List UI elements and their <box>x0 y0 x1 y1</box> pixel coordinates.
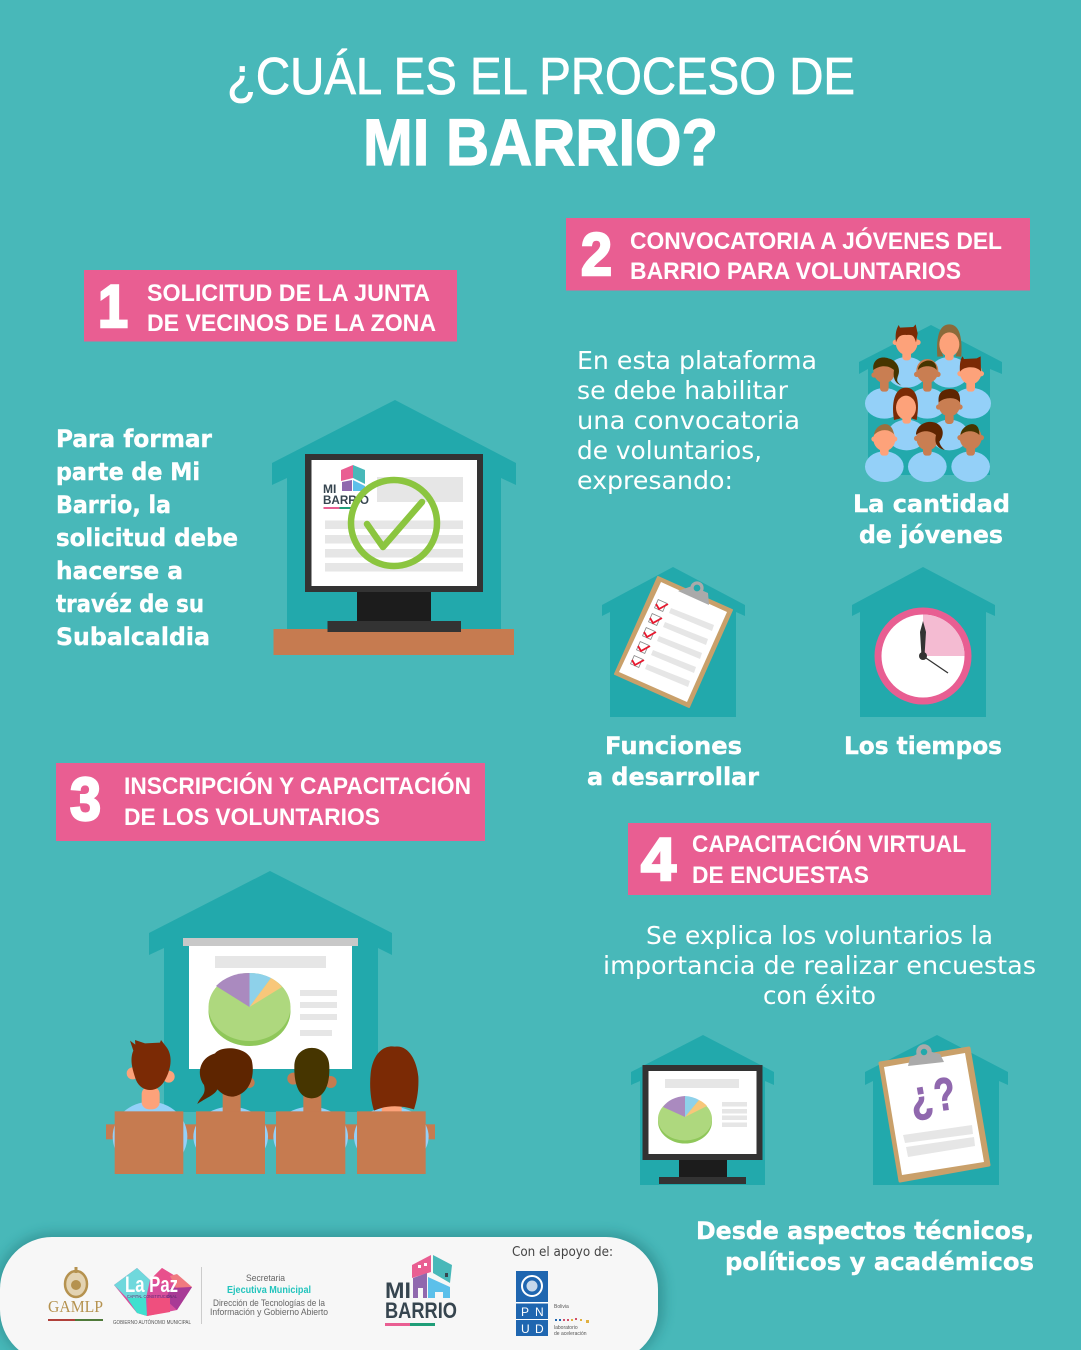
panel: footer logos <box>0 1233 664 1350</box>
icon: clipboard with question marks in a house <box>865 1035 1008 1185</box>
label: los tiempos: Los tiempos <box>844 732 1002 760</box>
step 4 heading: 4 <box>641 826 677 893</box>
logo: Mi Barrio: BARRIO <box>385 1298 457 1323</box>
step 4 heading: DE ENCUESTAS <box>692 862 869 889</box>
step 3 heading: DE LOS VOLUNTARIOS <box>124 804 380 831</box>
step 1 heading: DE VECINOS DE LA ZONA <box>147 310 436 337</box>
logo: GAMLP: GAMLP <box>48 1297 103 1316</box>
label: funciones a desarrollar <box>587 732 759 791</box>
icon: monitor with pie chart in a house <box>631 1035 774 1185</box>
logo: PNUD: laboratorio <box>554 1325 578 1331</box>
step 1 text: Subalcaldia <box>56 623 210 651</box>
step 2 text: expresando: <box>577 466 733 495</box>
logo: Mi Barrio <box>385 1255 457 1326</box>
step 4 heading <box>628 823 991 895</box>
step 2 heading: BARRIO PARA VOLUNTARIOS <box>630 258 961 285</box>
icon: monitor with check mark in a house: BARRIO <box>323 493 369 507</box>
logo: PNUD: N <box>535 1305 544 1319</box>
step 2 text: una convocatoria <box>577 406 800 435</box>
illustration: audience watching a presentation <box>106 871 435 1174</box>
logo: PNUD: Bolivia <box>554 1304 569 1310</box>
step 2 text: se debe habilitar <box>577 376 789 405</box>
step 4 heading: CAPACITACIÓN VIRTUAL <box>692 830 966 858</box>
panel: step 3 <box>56 763 485 1174</box>
secretaría text <box>210 1273 328 1318</box>
step 3 heading: INSCRIPCIÓN Y CAPACITACIÓN <box>124 772 471 800</box>
secretaría text: Información y Gobierno Abierto <box>210 1307 328 1318</box>
con el apoyo de: Con el apoyo de: <box>512 1245 613 1260</box>
icon: clipboard checklist in a house <box>602 567 745 717</box>
secretaría text: Secretaria <box>246 1273 285 1283</box>
logo: PNUD <box>516 1271 589 1337</box>
step 2 heading: CONVOCATORIA A JÓVENES DEL <box>630 227 1002 255</box>
step 1 text: hacerse a <box>56 557 183 585</box>
step 4 text <box>603 921 1036 1010</box>
logo: PNUD: de aceleración <box>554 1331 587 1337</box>
icon: monitor with check mark in a house <box>272 400 516 655</box>
title: MI BARRIO? <box>363 105 718 179</box>
icon: clock in a house <box>852 567 995 717</box>
step 1 text: solicitud debe <box>56 524 238 552</box>
label: la cantidad de jóvenes <box>853 490 1010 549</box>
step 2 text <box>577 346 817 495</box>
label: la cantidad de jóvenes: La cantidad <box>853 490 1010 518</box>
step 1 text <box>56 425 238 651</box>
label: la cantidad de jóvenes: de jóvenes <box>859 521 1003 549</box>
step 2 text: En esta plataforma <box>577 346 817 375</box>
step 3 heading: 3 <box>70 766 101 833</box>
icon: group of young people in a house <box>859 324 1002 482</box>
panel: step 1 <box>56 270 516 655</box>
secretaría text: Ejecutiva Municipal <box>227 1284 311 1296</box>
step 3 heading <box>56 763 485 841</box>
closing text <box>696 1217 1034 1276</box>
step 1 heading: 1 <box>98 273 128 340</box>
title <box>227 48 855 179</box>
step 1 heading: SOLICITUD DE LA JUNTA <box>147 280 430 307</box>
step 2 heading <box>566 218 1030 290</box>
label: funciones a desarrollar: Funciones <box>605 732 742 760</box>
logo: La Paz <box>113 1268 192 1326</box>
closing text: políticos y académicos <box>725 1248 1034 1276</box>
step 1 text: Barrio, la <box>56 491 171 519</box>
closing text: Desde aspectos técnicos, <box>696 1217 1034 1245</box>
logo: PNUD: P <box>521 1305 529 1319</box>
step 1 text: parte de Mi <box>56 458 200 486</box>
logo: PNUD: D <box>535 1322 544 1336</box>
logo: Mi Barrio: MI <box>385 1278 411 1303</box>
title: ¿CUÁL ES EL PROCESO DE <box>227 48 855 106</box>
logo: GAMLP <box>48 1267 103 1321</box>
step 4 text: con éxito <box>763 981 876 1010</box>
logo: La Paz: GOBIERNO AUTÓNOMO MUNICIPAL <box>113 1319 191 1326</box>
icon: monitor with check mark in a house: MI <box>323 482 336 496</box>
step 4 text: importancia de realizar encuestas <box>603 951 1036 980</box>
panel: step 4 <box>603 823 1036 1276</box>
label: funciones a desarrollar: a desarrollar <box>587 763 759 791</box>
icon: clipboard with question marks in a house: ¿ <box>905 1069 936 1124</box>
step 2 heading: 2 <box>581 221 612 288</box>
icon: clipboard with question marks in a house: ? <box>930 1067 959 1121</box>
panel: step 2 <box>566 218 1030 791</box>
step 1 text: Para formar <box>56 425 212 453</box>
logo: La Paz: CAPITAL CONSTITUCIONAL <box>127 1294 177 1299</box>
step 2 text: de voluntarios, <box>577 436 762 465</box>
step 1 heading <box>84 270 457 342</box>
logo: La Paz: La Paz <box>125 1272 178 1297</box>
logo: PNUD: U <box>521 1322 530 1336</box>
step 1 text: travéz de su <box>56 590 204 618</box>
step 4 text: Se explica los voluntarios la <box>646 921 993 950</box>
secretaría text: Dirección de Tecnologías de la <box>213 1298 326 1309</box>
